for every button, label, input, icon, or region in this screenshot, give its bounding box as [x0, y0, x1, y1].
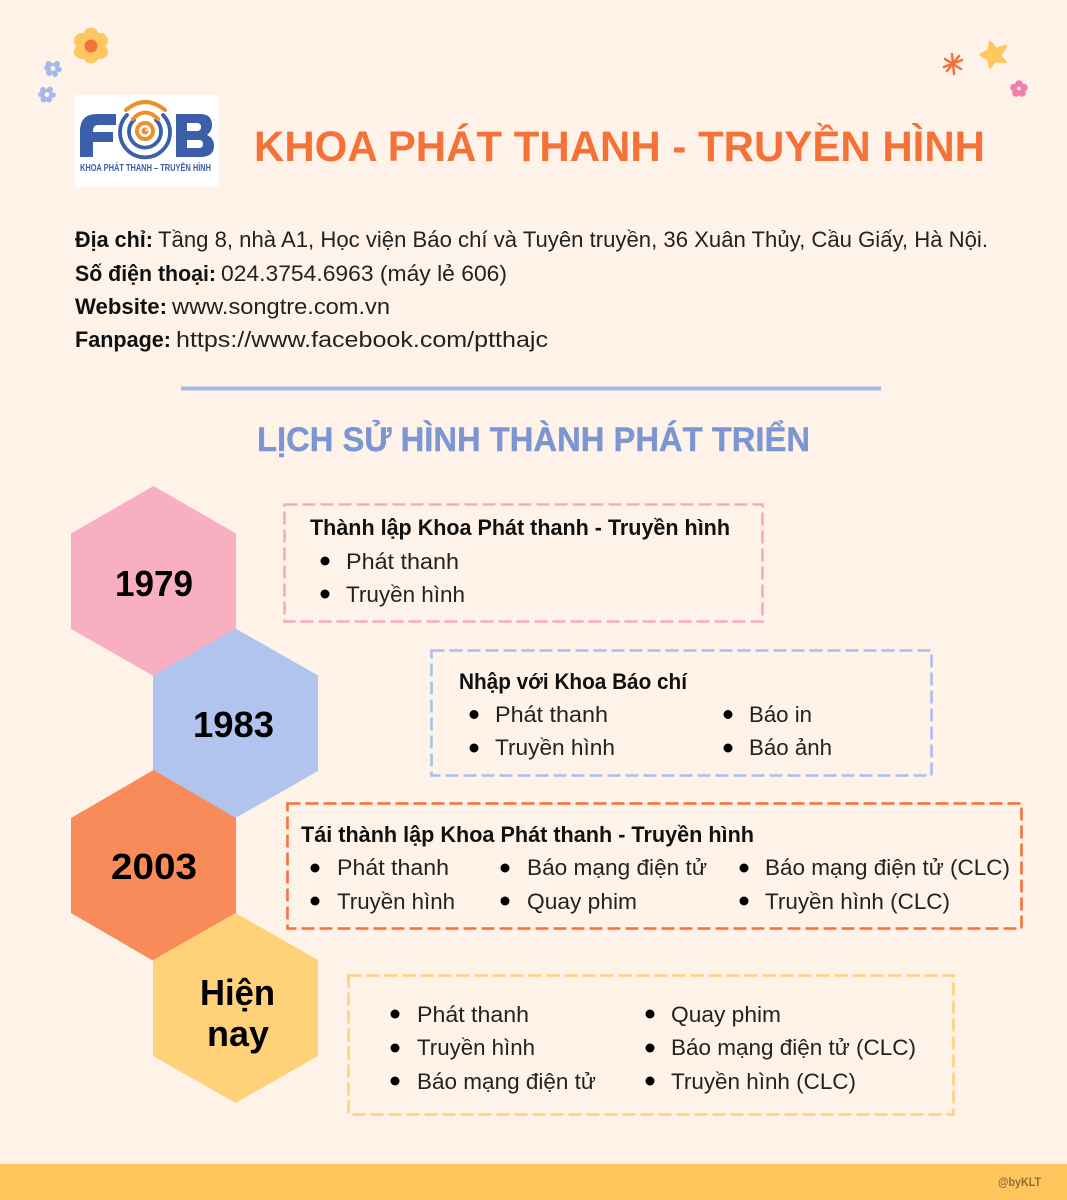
- list: Báo ảnh: [749, 735, 832, 760]
- address: Tầng 8, nhà A1, Học viện Báo chí và Tuyên truyền, 36 Xuân Thủy, Cầu Giấy, Hà Nội.: [158, 227, 988, 252]
- list: Phát thanh: [417, 1002, 529, 1027]
- fanpage: https://www.facebook.com/ptthajc: [176, 327, 548, 352]
- list: Truyền hình: [417, 1035, 535, 1060]
- fanpage: [75, 327, 548, 352]
- logo ring: [120, 115, 170, 157]
- logo signal arcs: [126, 102, 165, 139]
- hexagon: Hiện nay: nay: [207, 1013, 269, 1054]
- panel: 1983: [432, 650, 932, 776]
- list: [320, 549, 465, 607]
- list: Báo mạng điện tử: [527, 855, 707, 880]
- hexagon: Hiện nay: [153, 913, 318, 1103]
- fanpage: Fanpage:: [75, 327, 171, 352]
- credit: @byKLT: [998, 1177, 1041, 1189]
- list: Truyền hình (CLC): [671, 1069, 856, 1094]
- phone: [75, 261, 507, 286]
- list: [470, 702, 832, 760]
- section heading: LỊCH SỬ HÌNH THÀNH PHÁT TRIỂN: [257, 421, 810, 459]
- list: Phát thanh: [495, 702, 608, 727]
- list: Quay phim: [527, 889, 637, 914]
- icon: orange asterisk: [944, 54, 962, 74]
- panel heading: Thành lập Khoa Phát thanh - Truyền hình: [310, 515, 730, 540]
- footer bar: [0, 1164, 1067, 1200]
- icon: pink flower: [1010, 80, 1028, 97]
- list: Phát thanh: [337, 855, 449, 880]
- logo caption: KHOA PHÁT THANH – TRUYỀN HÌNH: [80, 161, 211, 174]
- website: Website:: [75, 294, 167, 319]
- list: Phát thanh: [346, 549, 459, 574]
- website: [75, 294, 390, 319]
- phone: Số điện thoại:: [75, 261, 216, 286]
- panel: 2003: [288, 804, 1022, 928]
- list: Truyền hình: [495, 735, 615, 760]
- title: KHOA PHÁT THANH - TRUYỀN HÌNH: [254, 123, 985, 171]
- list: Báo mạng điện tử: [417, 1069, 596, 1094]
- hexagon: 1979: 1979: [115, 563, 193, 604]
- logo: [75, 95, 219, 187]
- list: [390, 1002, 916, 1094]
- panel: 1979: [284, 504, 762, 622]
- website: www.songtre.com.vn: [171, 294, 390, 319]
- list: Quay phim: [671, 1002, 781, 1027]
- list: Báo in: [749, 702, 812, 727]
- logo letter F: [80, 114, 116, 157]
- list: Truyền hình: [337, 889, 455, 914]
- icon: blue flower upper: [44, 61, 62, 77]
- logo letter B: [176, 114, 214, 157]
- panel: Hiện nay: [348, 976, 954, 1114]
- icon: blue flower lower: [38, 86, 56, 102]
- contact block: [75, 227, 988, 352]
- list: Báo mạng điện tử (CLC): [765, 855, 1010, 880]
- phone: 024.3754.6963 (máy lẻ 606): [221, 261, 507, 286]
- address: Địa chỉ:: [75, 227, 153, 252]
- icon: yellow flower: [74, 28, 108, 64]
- hexagon: 1979: [71, 486, 236, 676]
- panel heading: Nhập với Khoa Báo chí: [459, 669, 688, 694]
- icon: yellow star: [980, 42, 1006, 68]
- logo lens: [142, 128, 148, 134]
- list: Báo mạng điện tử (CLC): [671, 1035, 916, 1060]
- list: Truyền hình: [346, 582, 465, 607]
- list: [310, 855, 1010, 914]
- panel heading: Tái thành lập Khoa Phát thanh - Truyền hình: [301, 822, 754, 847]
- hexagon: 2003: 2003: [111, 846, 197, 887]
- list: Truyền hình (CLC): [765, 889, 950, 914]
- hexagon: Hiện nay: Hiện: [200, 972, 275, 1013]
- hexagon: 2003: [71, 770, 236, 961]
- hexagon: 1983: 1983: [193, 704, 274, 745]
- hexagon: 1983: [153, 628, 318, 818]
